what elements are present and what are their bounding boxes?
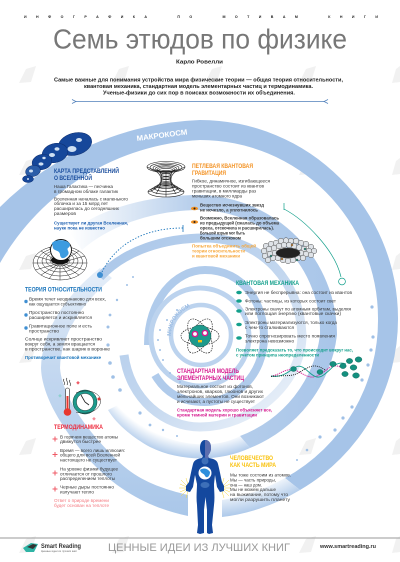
text: quantum mechanics: с учетом принципа неопределенности	[236, 352, 319, 357]
text: thermodynamics: На уровне физики будущее	[60, 466, 118, 472]
text: quantum mechanics: Позволяет предсказать то, что происходит вокруг нас,	[236, 347, 353, 352]
text: quantum mechanics: электрона невозможно	[245, 338, 294, 344]
heading: map of universe: КАРТА ПРЕДСТАВЛЕНИЙ	[54, 166, 119, 175]
text: orange note	[192, 242, 256, 258]
spiral: outer band	[0, 120, 398, 517]
intro text: Самые важные для понимания устройства мира физические теории — общая теория относительности,	[54, 76, 344, 84]
text: humanity: Мы — часть природы,	[230, 478, 276, 482]
heading: standard model	[177, 368, 244, 382]
text: loop quantum gravity facts: Возможно, Вселенная образовалась	[200, 214, 279, 220]
text: standard model: Материальное состоит из фотонов,	[177, 384, 253, 389]
bullets: quantum mechanics	[236, 291, 242, 340]
text: standard model: Стандартная модель хорошо объясняет все,	[177, 406, 272, 412]
text: thermodynamics: распределением теплоты	[60, 476, 115, 481]
text: humanity: она — наш дом.	[230, 482, 262, 488]
footer tagline: ЦЕННЫЕ ИДЕИ ИЗ ЛУЧШИХ КНИГ	[108, 542, 290, 554]
text: loop quantum gravity: пространство состоит из квантов	[192, 184, 265, 188]
text: loop quantum gravity facts: из предыдущей (сжалась до объема	[200, 220, 279, 226]
logo	[23, 543, 81, 553]
text: loop quantum gravity	[192, 178, 271, 198]
text: relativity: Противоречит квантовой механике	[25, 354, 101, 360]
text: quantum mechanics: или поглощая энергию (квантовые скачки)	[245, 311, 341, 316]
bullets: relativity	[24, 300, 28, 330]
text: relativity: Время течет неодинаково для всех,	[29, 296, 106, 302]
text: loop quantum gravity facts	[200, 202, 279, 240]
text: loop quantum gravity: гравитации, в миллиарды раз	[192, 188, 256, 194]
text: loop quantum gravity facts: Большой взрыв мог быть	[200, 230, 245, 236]
heading: standard model: СТАНДАРТНАЯ МОДЕЛЬ	[177, 368, 239, 375]
text: thermodynamics: излучают тепло	[60, 489, 94, 494]
text: quantum mechanics: Электроны скачут по атомным орбитам, выделяя	[245, 306, 352, 311]
text: standard model: кроме темной материи и гравитации	[177, 412, 257, 418]
spiral: second band	[70, 195, 337, 458]
text: loop quantum gravity facts: не исчезло, а уплотнилось	[200, 208, 258, 212]
heading: standard model: ЭЛЕМЕНТАРНЫХ ЧАСТИЦ	[177, 375, 244, 382]
text: orange note: теории относительности	[192, 248, 245, 254]
text: standard model: электронов, кварков, глюонов и других	[177, 389, 264, 394]
icon: gravity well with globe	[33, 240, 87, 280]
title: Семь этюдов по физике	[53, 24, 347, 54]
heading: map of universe: О ВСЕЛЕННОЙ	[54, 173, 92, 182]
text: humanity: могли разрушить планету	[230, 497, 291, 502]
spiral: dots	[106, 276, 375, 461]
text: orange note: и квантовой механики	[192, 252, 240, 258]
icon: human figure	[186, 440, 224, 534]
text: thermodynamics: В горячем вещество атомы	[60, 434, 118, 439]
arrow: teal arc	[284, 203, 345, 285]
icon: quantum network	[261, 238, 317, 264]
text: relativity: как ощущается субъективно	[29, 302, 86, 306]
text: thermodynamics	[54, 434, 125, 508]
text: thermodynamics: общего для всей Вселенной	[60, 452, 120, 458]
text: relativity: пространство	[29, 328, 59, 334]
heading: quantum mechanics: КВАНТОВАЯ МЕХАНИКА	[236, 280, 299, 287]
text: map of universe: науке пока не известно	[54, 226, 105, 230]
text: loop quantum gravity: меньших атомного ядра	[192, 194, 242, 198]
logo: Smart Reading	[41, 544, 81, 550]
text: map of universe: размеров	[54, 211, 77, 216]
text: relativity: Солнце искривляет пространство	[25, 336, 102, 342]
text: quantum mechanics	[236, 290, 353, 357]
intro text: квантовая механика, стандартная модель элементарных частиц и термодинамика.	[84, 84, 314, 90]
text: quantum mechanics: Энергия не беспрерывна: она состоит из квантов	[245, 290, 353, 295]
text: quantum mechanics: Точно спрогнозировать место появления	[245, 334, 336, 338]
text: relativity: расширяется и искривляется	[29, 315, 93, 320]
text: map of universe: расширилась до сегодняшних	[54, 206, 120, 211]
label: microcosm: МИКРОКОСМ	[167, 304, 190, 336]
text: relativity: в пространстве, как шарик в воронке	[25, 346, 110, 352]
footer url: www.smartreading.ru	[319, 544, 376, 550]
heading: relativity: ТЕОРИЯ ОТНОСИТЕЛЬНОСТИ	[25, 286, 102, 294]
text: standard model	[177, 384, 272, 418]
text: thermodynamics: движутся быстрее	[60, 439, 101, 444]
author: Карло Ровелли	[176, 60, 223, 66]
icon: thermometer and clock	[58, 378, 101, 421]
text: thermodynamics: настоящего не существует	[60, 458, 118, 462]
heading: map of universe	[54, 166, 119, 182]
divider with arrows	[72, 100, 328, 104]
footer line	[0, 538, 400, 539]
text: thermodynamics: Время — всего лишь иллюзия:	[60, 448, 125, 453]
text: humanity	[230, 472, 291, 502]
heading: loop quantum gravity: ГРАВИТАЦИЯ	[192, 170, 226, 177]
icon: galaxies	[22, 129, 94, 182]
heading: humanity	[230, 455, 276, 469]
text: quantum mechanics: Фотоны: частицы, из которых состоит свет	[245, 298, 337, 303]
text: quantum mechanics: Электроны материализуются, только когда	[245, 320, 337, 325]
intro text: Ученые-физики до сих пор в поисках возможности их объединения.	[103, 90, 296, 96]
text: loop quantum gravity facts: ореха, отскочила и расширилась).	[200, 226, 274, 230]
text: orange note: Попытка объединить общей	[192, 242, 256, 248]
logo: Ценные идеи из лучших книг	[41, 550, 77, 553]
text: loop quantum gravity facts: большим отскоком	[200, 234, 241, 240]
text: quantum mechanics: с чем-то сталкиваются	[245, 325, 295, 330]
text: humanity: Мы тоже состоим из атомов.	[230, 472, 291, 478]
spiral: inner rings	[100, 238, 302, 427]
text: thermodynamics: Черные дыры постоянно	[60, 484, 114, 490]
text: map of universe	[54, 184, 128, 230]
text: map of universe: Вселенная началась с маленького	[54, 196, 128, 202]
text: standard model: мельчайших элементов. Они возникают	[177, 393, 265, 399]
text: standard model: и исчезают, а пустоты не существует	[177, 399, 256, 404]
heading: thermodynamics: ТЕРМОДИНАМИКА	[54, 424, 103, 431]
heading: humanity: КАК ЧАСТЬ МИРА	[230, 462, 276, 469]
text: loop quantum gravity: Гибкое, динамичное, изгибающееся	[192, 178, 271, 184]
text: humanity: на выживание, потому что	[230, 492, 288, 497]
icon: sun rays at hands	[179, 478, 231, 498]
text: map of universe: в громадном облаке галактик	[54, 189, 119, 194]
text: map of universe: Существует ли другая Вселенная,	[54, 220, 128, 226]
text: loop quantum gravity facts: Вещество исчезнувших звезд	[200, 202, 264, 208]
arrow: blue dotted arc	[97, 225, 183, 278]
icon: atom	[181, 315, 219, 357]
text: relativity: вокруг себя, а земля вращается	[25, 342, 96, 346]
text: thermodynamics: отличается от прошлого	[60, 471, 112, 476]
icon: bullets eye	[191, 207, 198, 224]
label: macrocosm: МАКРОКОСМ	[136, 127, 188, 143]
icon: quantum wave	[271, 357, 362, 378]
heading: humanity: ЧЕЛОВЕЧЕСТВО	[230, 455, 273, 462]
bullets: thermodynamics	[52, 436, 58, 492]
text: relativity	[25, 296, 110, 360]
intro text	[54, 76, 344, 96]
text: thermodynamics: будет основан на теплоте	[54, 503, 109, 508]
text: relativity: Гравитационное поле и есть	[29, 324, 93, 328]
heading: loop quantum gravity	[192, 163, 253, 177]
overline: И Н Ф О Г Р А Ф И К А П О М О Т И В А М К Н И Г И	[24, 15, 378, 19]
text: relativity: Пространство постоянно	[29, 310, 84, 315]
text: thermodynamics: Ответ о природе времени	[54, 498, 109, 503]
text: map of universe: облачка и за 15 млрд лет	[54, 201, 109, 206]
text: humanity: Мы не можем дальше	[230, 487, 276, 492]
icon: wormhole	[147, 162, 185, 197]
text: map of universe: Наша Галактика — песчинка	[54, 184, 113, 189]
heading: loop quantum gravity: ПЕТЛЕВАЯ КВАНТОВАЯ	[192, 163, 253, 170]
